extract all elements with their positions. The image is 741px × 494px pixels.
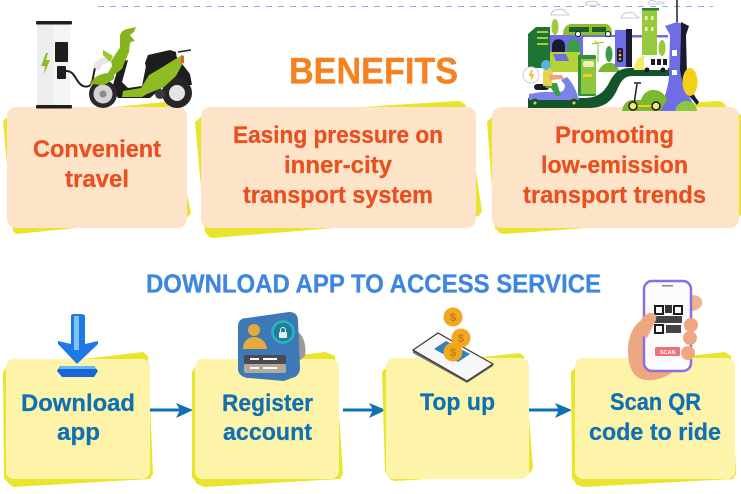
panel: scan qr: [571, 281, 736, 487]
text: promoting low-emission: [523, 122, 706, 209]
arrow: [150, 403, 193, 418]
control tower: [660, 22, 696, 111]
text: register account: [222, 390, 313, 446]
icon: phone with coins: $: [450, 347, 456, 359]
icon: download arrow: [57, 314, 98, 377]
text: easing pressure: inner-city: [284, 152, 393, 179]
text: download app: app: [57, 419, 100, 446]
clouds: [551, 1, 664, 18]
road: [528, 68, 673, 108]
arrow: [529, 403, 572, 418]
text: convenient travel: [33, 136, 161, 193]
text: download app: Download: [21, 390, 135, 417]
icon: hand holding phone: SCAN: [660, 350, 676, 356]
panel: download app: [3, 314, 153, 487]
text: register account: account: [223, 419, 312, 446]
panel: promoting low-emission: [487, 101, 741, 234]
icon: hand holding phone: [628, 281, 702, 380]
text: scan qr: [589, 389, 721, 446]
icon: charging station and scooter: [36, 21, 192, 108]
icon: phone with coins: $: [458, 333, 464, 345]
panel: easing pressure: [195, 101, 482, 238]
icon: phone with coins: [413, 308, 493, 383]
heading: download app: DOWNLOAD APP TO ACCESS SERVICE: [146, 268, 601, 298]
text: promoting low-emission: transport trends: [523, 182, 706, 209]
text: convenient travel: travel: [65, 166, 129, 193]
icon: phone with coins: $: [450, 312, 456, 324]
text: scan qr: Scan QR: [610, 389, 701, 416]
text: scan qr: code to ride: [589, 419, 721, 446]
text: register account: Register: [222, 390, 313, 417]
panel: top up: [382, 308, 533, 481]
text: promoting low-emission: Promoting: [555, 122, 674, 149]
text: easing pressure: Easing pressure on: [233, 122, 443, 149]
panel: convenient travel: [3, 102, 191, 234]
icon: green city illustration: [523, 0, 699, 111]
title: benefits: BENEFITS: [289, 50, 458, 92]
text: convenient travel: Convenient: [33, 136, 161, 163]
text: easing pressure: [233, 122, 443, 209]
text: download app: [21, 390, 135, 446]
icon: account card: [238, 312, 305, 381]
text: promoting low-emission: low-emission: [541, 152, 688, 179]
panel: register account: [192, 312, 343, 487]
text: easing pressure: transport system: [243, 182, 433, 209]
text: top up: Top up: [420, 389, 495, 416]
arrow: [343, 403, 386, 418]
rider: [529, 77, 579, 100]
